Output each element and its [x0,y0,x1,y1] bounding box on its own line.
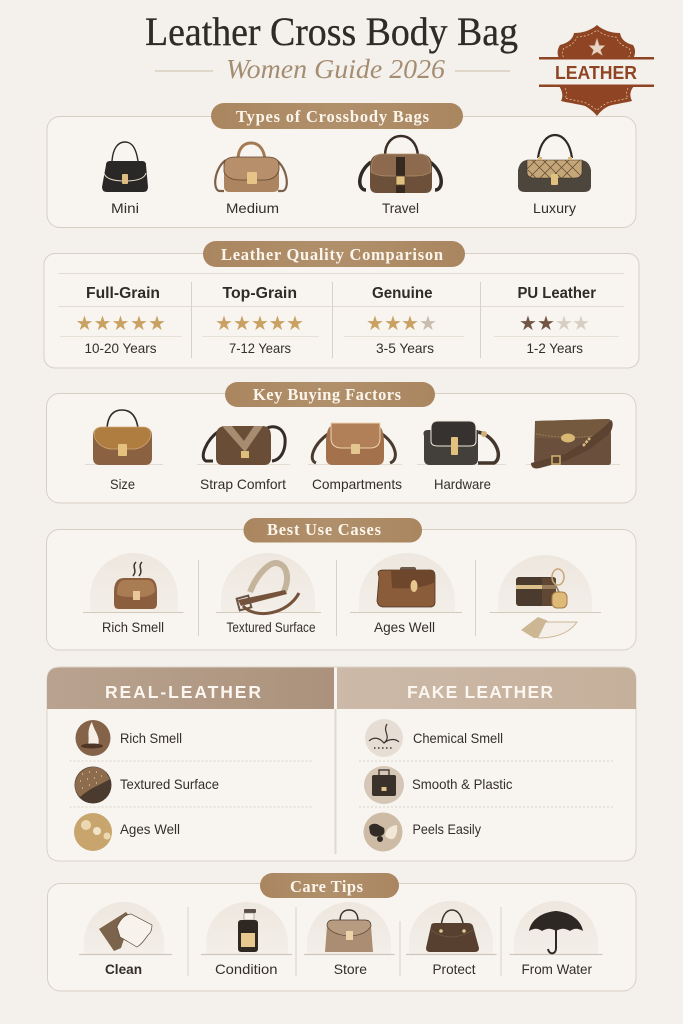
leather badge [539,25,654,116]
star ratings: ★ [286,311,304,335]
row: chemical smell [365,719,503,757]
star ratings: ★ [94,311,111,335]
heading: types [211,103,463,129]
star ratings: ★ [251,311,269,335]
panel: best use cases [46,518,636,650]
durability years: 1-2 Years [526,340,583,356]
heading: use cases [244,518,422,542]
use case: textured surface [216,553,321,635]
star ratings: ★ [537,311,555,335]
tip: from water [510,901,602,977]
column headings [86,285,596,302]
star ratings: ★ [76,311,93,335]
tip: protect: Protect [432,961,476,977]
label: medium: Medium [226,200,279,216]
label: luxury: Luxury [533,200,576,216]
star ratings: ★ [419,311,437,335]
heading: use cases: Best Use Cases [267,520,382,539]
star ratings: ★ [384,311,402,335]
bag: compartments [312,423,395,465]
heading: quality: Leather Quality Comparison [221,245,443,264]
leather badge: LEATHER [555,63,637,83]
column headings: Genuine [372,285,433,302]
tip: clean: Clean [105,961,142,977]
bag: flap with hardware [531,419,613,468]
row: peels easily: Peels Easily [412,821,481,837]
use case: textured surface: Textured Surface [226,619,316,635]
row: textured surface [74,766,219,804]
row: smooth and plastic [364,766,512,804]
star ratings: ★ [401,311,419,335]
header: fake leather: FAKE LEATHER [407,682,553,702]
row: rich smell [76,720,182,756]
durability years: 10-20 Years [84,340,156,356]
panel: care tips [48,873,636,991]
panel: types of crossbody bags [47,103,636,228]
label: hardware: Hardware [434,476,491,492]
star ratings: ★ [519,311,537,335]
durability years [84,340,583,356]
star ratings: ★ [233,311,251,335]
row: rich smell: Rich Smell [120,730,182,746]
row: textured surface: Textured Surface [120,776,219,792]
star ratings: ★ [130,311,148,335]
bag: strap comfort [203,426,285,465]
title: Leather Cross Body Bag [145,9,518,54]
star ratings: ★ [215,311,233,335]
label: size: Size [110,476,135,492]
label: travel: Travel [382,200,419,216]
star ratings: ★ [572,311,590,335]
heading: factors [225,382,435,407]
column headings: PU Leather [518,285,596,302]
use case: ages well: Ages Well [374,619,435,635]
heading: factors: Key Buying Factors [253,385,402,404]
label: compartments: Compartments [312,476,402,492]
heading: types: Types of Crossbody Bags [236,107,430,126]
panel: key buying factors [46,382,636,503]
tip: store [304,902,395,977]
heading: care tips: Care Tips [290,877,364,896]
tip: clean [79,902,172,977]
tip: from water: From Water [522,961,592,977]
use case: keychain and hand [490,555,601,638]
use case: ages well [350,553,462,635]
column headings: Top-Grain [222,285,297,302]
subtitle: Women Guide 2026 [226,54,446,84]
star ratings: ★ [555,311,573,335]
bag: hardware [424,421,498,465]
column headings: Full-Grain [86,285,160,302]
tip: protect [406,901,497,977]
row: ages well: Ages Well [120,821,180,837]
row: smooth and plastic: Smooth & Plastic [412,776,512,792]
star ratings [76,311,590,335]
star ratings: ★ [148,311,166,335]
bag: size [93,410,152,465]
row: ages well [74,813,180,851]
panel: leather quality comparison [44,241,639,368]
header: real leather [47,668,334,709]
bag: medium [215,143,287,192]
use case: rich smell: Rich Smell [102,619,164,635]
label: strap comfort: Strap Comfort [200,476,286,492]
row: peels easily [364,812,481,852]
durability years: 7-12 Years [229,340,291,356]
star ratings: ★ [112,311,129,335]
use case: rich smell [83,553,184,635]
bag: travel [360,136,441,193]
durability years: 3-5 Years [376,340,434,356]
tip: condition [201,902,292,977]
panel: real vs fake leather [47,667,636,861]
header: fake leather [337,668,636,709]
heading: care tips [260,873,399,898]
tip: condition: Condition [215,961,278,977]
bag: mini [102,142,148,192]
tip: store: Store [334,961,367,977]
label: mini: Mini [111,200,139,216]
heading: quality [203,241,465,267]
star ratings: ★ [269,311,286,335]
star ratings: ★ [366,311,384,335]
bag: luxury [518,135,591,192]
row: chemical smell: Chemical Smell [413,730,503,746]
header: real leather: REAL-LEATHER [105,682,261,702]
